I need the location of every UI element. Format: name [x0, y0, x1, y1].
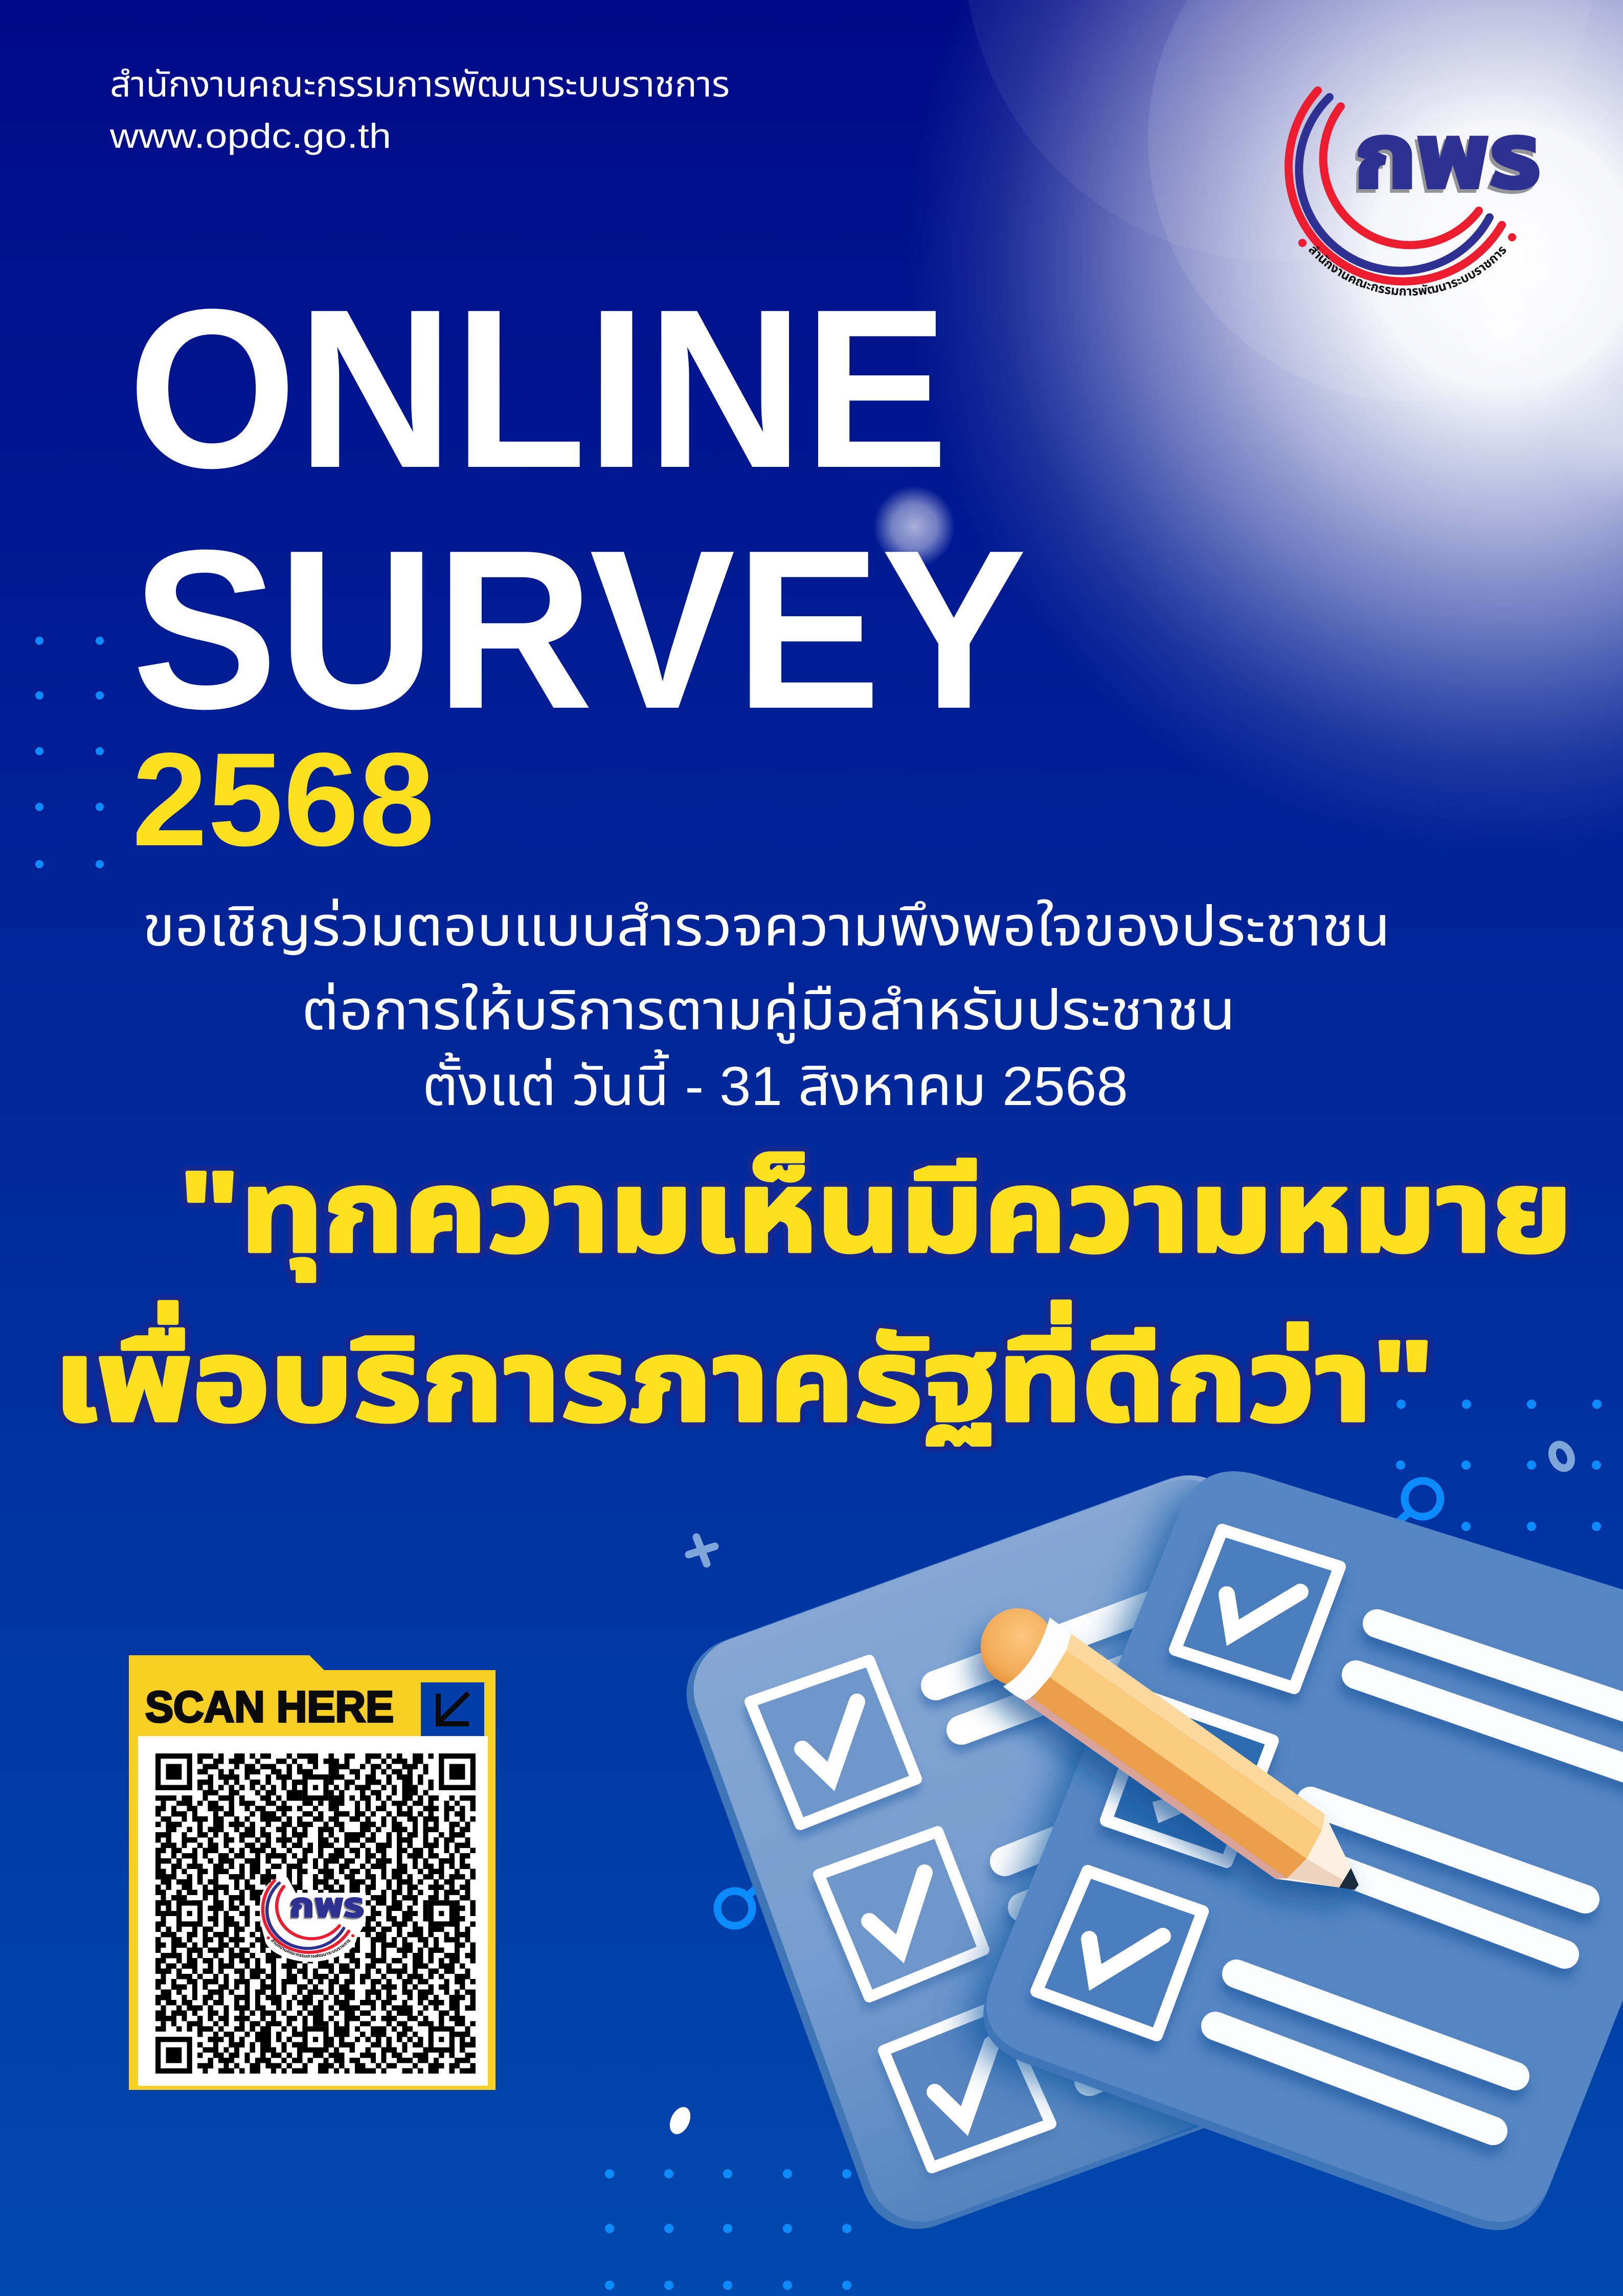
- shadow of front board: [942, 1479, 1201, 2142]
- front checkbox 3: [1036, 1871, 1203, 2035]
- decorative donut top right: [1548, 1442, 1575, 1471]
- title: survey: SURVEY: [132, 503, 1027, 756]
- arrow box: [421, 1682, 484, 1736]
- back text lines: [936, 1596, 1176, 2081]
- back checklist board: [686, 1475, 1207, 2229]
- organisation name: สำนักงานคณะกรรมการพัฒนาระบบราชการ: [110, 64, 730, 104]
- logo: กพร: [1352, 110, 1538, 210]
- back checkbox 1: [750, 1660, 916, 1825]
- decorative plus: [689, 1537, 715, 1564]
- website: www.opdc.go.th: [109, 117, 391, 155]
- back checkbox 2: [819, 1832, 984, 1997]
- QR panel: [129, 1655, 495, 2090]
- white QR background: [138, 1736, 488, 2086]
- lens flare: [873, 486, 955, 568]
- title: online: ONLINE: [128, 262, 949, 515]
- QR code: [155, 1753, 476, 2074]
- invitation line 2: ต่อการให้บริการตามคู่มือสำหรับประชาชน: [302, 979, 1235, 1044]
- back checkbox 3: [884, 2005, 1051, 2168]
- decorative ring top right: [1395, 1481, 1440, 1525]
- scan here label: SCAN HERE: [145, 1683, 394, 1731]
- QR centre logo: สำนักงานคณะกรรมการพัฒนาระบบราชการ: [271, 1939, 351, 1957]
- front checkbox 1: [1175, 1530, 1340, 1688]
- logo: สำนักงานคณะกรรมการพัฒนาระบบราชการ: [1309, 246, 1506, 296]
- QR centre logo: [260, 1877, 366, 1962]
- invitation line 1: ขอเชิญร่วมตอบแบบสำรวจความพึงพอใจของประชาชน: [143, 895, 1390, 957]
- front checkbox 2: [1106, 1698, 1273, 1862]
- decorative donut bottom: [666, 2104, 694, 2137]
- front text lines: [1215, 1624, 1623, 2131]
- decorative dots: right: [1396, 1400, 1602, 1531]
- decorative dots: left: [35, 637, 104, 868]
- slogan line 2: เพื่อบริการภาครัฐที่ดีกว่า": [54, 1301, 1434, 1445]
- slogan line 1: "ทุกความเห็นมีความหมาย: [179, 1148, 1572, 1281]
- year: 2568: [132, 726, 435, 874]
- QR centre logo: กพร: [288, 1888, 363, 1926]
- decorative dots: bottom: [605, 2169, 851, 2290]
- logo: [1284, 86, 1541, 296]
- QR centre logo: กพร: [289, 1886, 364, 1924]
- front checklist board: [983, 1471, 1623, 2230]
- slogan line 1: "ทุกความเห็นมีความหมาย: [179, 1148, 1572, 1281]
- checklist illustration: [674, 1460, 1623, 2241]
- slogan line 2: เพื่อบริการภาครัฐที่ดีกว่า": [54, 1301, 1434, 1445]
- logo: กพร: [1355, 106, 1541, 207]
- light glow top right: [767, 0, 1623, 920]
- invitation line 3: ตั้งแต่ วันนี้ - 31 สิงหาคม 2568: [422, 1049, 1128, 1117]
- pencil: [981, 1608, 1359, 1890]
- QR frame: [129, 1655, 495, 2090]
- decorative ring left: [717, 1883, 762, 1926]
